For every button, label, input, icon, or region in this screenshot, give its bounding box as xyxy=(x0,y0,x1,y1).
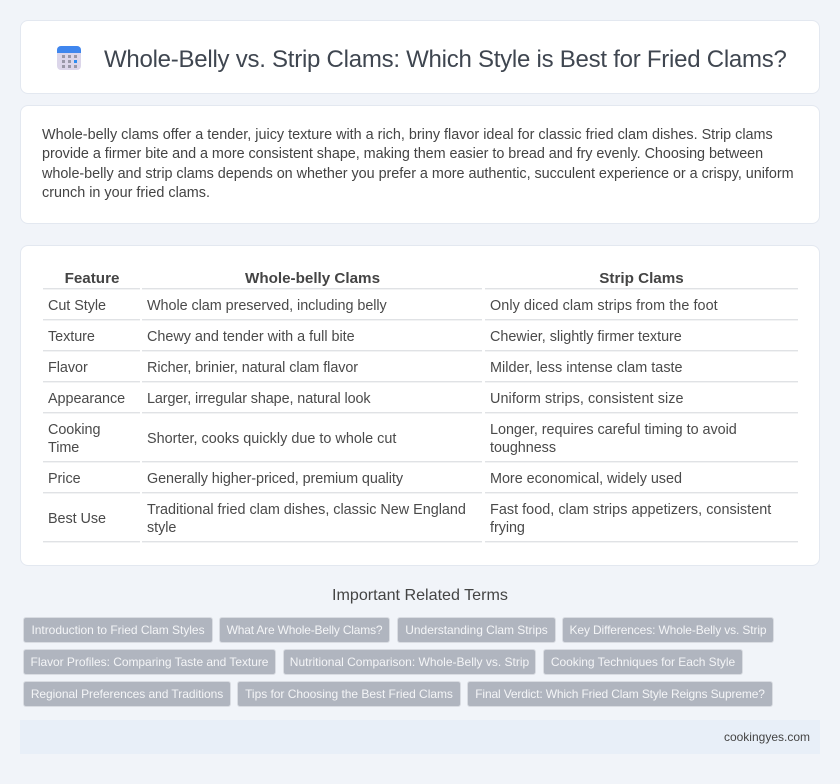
row: best use: Fast food, clam strips appetizers, consistent xyxy=(490,502,771,518)
icon: calendar xyxy=(57,46,81,70)
tags: related terms: Cooking Techniques for Each Style xyxy=(551,655,735,669)
row: cut style: Only diced clam strips from the foot xyxy=(490,298,718,314)
panel: introduction xyxy=(20,105,820,224)
row: texture: Chewy and tender with a full bite xyxy=(147,329,355,345)
row: texture: Chewier, slightly firmer texture xyxy=(490,329,682,345)
tags: related terms: Tips for Choosing the Best Fried Clams xyxy=(245,687,453,701)
row: cooking time: Cooking xyxy=(48,422,100,438)
row: best use xyxy=(48,502,772,536)
row: appearance xyxy=(48,391,684,407)
row: appearance: Larger, irregular shape, natural look xyxy=(147,391,370,407)
row: cooking time xyxy=(48,422,737,456)
panel: title header xyxy=(20,20,820,94)
row: flavor: Richer, brinier, natural clam flavor xyxy=(147,360,358,376)
row: cooking time: toughness xyxy=(490,440,556,456)
text block: introduction: Whole-belly clams offer a tender, juicy texture with a rich, briny flavor ideal for classic fried clam dishes. Strip clams xyxy=(42,127,773,143)
tags: related terms: Understanding Clam Strips xyxy=(405,623,548,637)
row: texture: Texture xyxy=(48,329,95,345)
table header: Feature xyxy=(65,270,119,287)
row: flavor xyxy=(48,360,683,376)
text block: introduction: provide a firmer bite and a more consistent shape, making them easier to bread and fry evenly. Choosing between xyxy=(42,146,763,162)
table header: Whole-belly Clams xyxy=(245,270,380,287)
row: cut style: Whole clam preserved, including belly xyxy=(147,298,387,314)
tags: related terms: Regional Preferences and Traditions xyxy=(31,687,223,701)
tags: related terms: Final Verdict: Which Fried Clam Style Reigns Supreme? xyxy=(475,687,765,701)
row: flavor: Milder, less intense clam taste xyxy=(490,360,683,376)
footer xyxy=(20,720,820,754)
row: texture xyxy=(48,329,682,345)
row: best use: Traditional fried clam dishes, classic New England xyxy=(147,502,466,518)
row: best use: Best Use xyxy=(48,511,106,527)
tags: related terms: What Are Whole-Belly Clams? xyxy=(227,623,382,637)
text block: introduction: crunch in your fried clams. xyxy=(42,185,210,201)
table header xyxy=(65,270,684,287)
text block: introduction: whole-belly and strip clams depends on whether you prefer a more authentic, succulent experience or a crispy, uniform xyxy=(42,166,794,182)
footer source: cookingyes.com xyxy=(724,730,810,744)
heading: important related terms: Important Related Terms xyxy=(332,586,508,604)
tags: related terms: Key Differences: Whole-Belly vs. Strip xyxy=(570,623,766,637)
row: best use: frying xyxy=(490,520,525,536)
row: flavor: Flavor xyxy=(48,360,88,376)
row: price xyxy=(48,471,682,487)
row: best use: style xyxy=(147,520,176,536)
title: Whole-Belly vs. Strip Clams: Which Style is Best for Fried Clams? xyxy=(104,46,787,73)
tags: related terms: Flavor Profiles: Comparing Taste and Texture xyxy=(31,655,268,669)
table header: Strip Clams xyxy=(599,270,684,287)
row: price: More economical, widely used xyxy=(490,471,682,487)
row: cut style xyxy=(48,298,718,314)
row: cut style: Cut Style xyxy=(48,298,106,314)
row: appearance: Uniform strips, consistent size xyxy=(490,391,684,407)
row: cooking time: Time xyxy=(48,440,79,456)
tags: related terms xyxy=(23,617,774,707)
tags: related terms: Introduction to Fried Clam Styles xyxy=(31,623,205,637)
row: price: Price xyxy=(48,471,81,487)
row: price: Generally higher-priced, premium quality xyxy=(147,471,403,487)
panel: comparison table xyxy=(20,245,820,566)
tags: related terms: Nutritional Comparison: Whole-Belly vs. Strip xyxy=(290,655,529,669)
row: cooking time: Shorter, cooks quickly due to whole cut xyxy=(147,431,396,447)
text block: introduction xyxy=(42,127,794,201)
row: cooking time: Longer, requires careful timing to avoid xyxy=(490,422,737,438)
row: appearance: Appearance xyxy=(48,391,125,407)
